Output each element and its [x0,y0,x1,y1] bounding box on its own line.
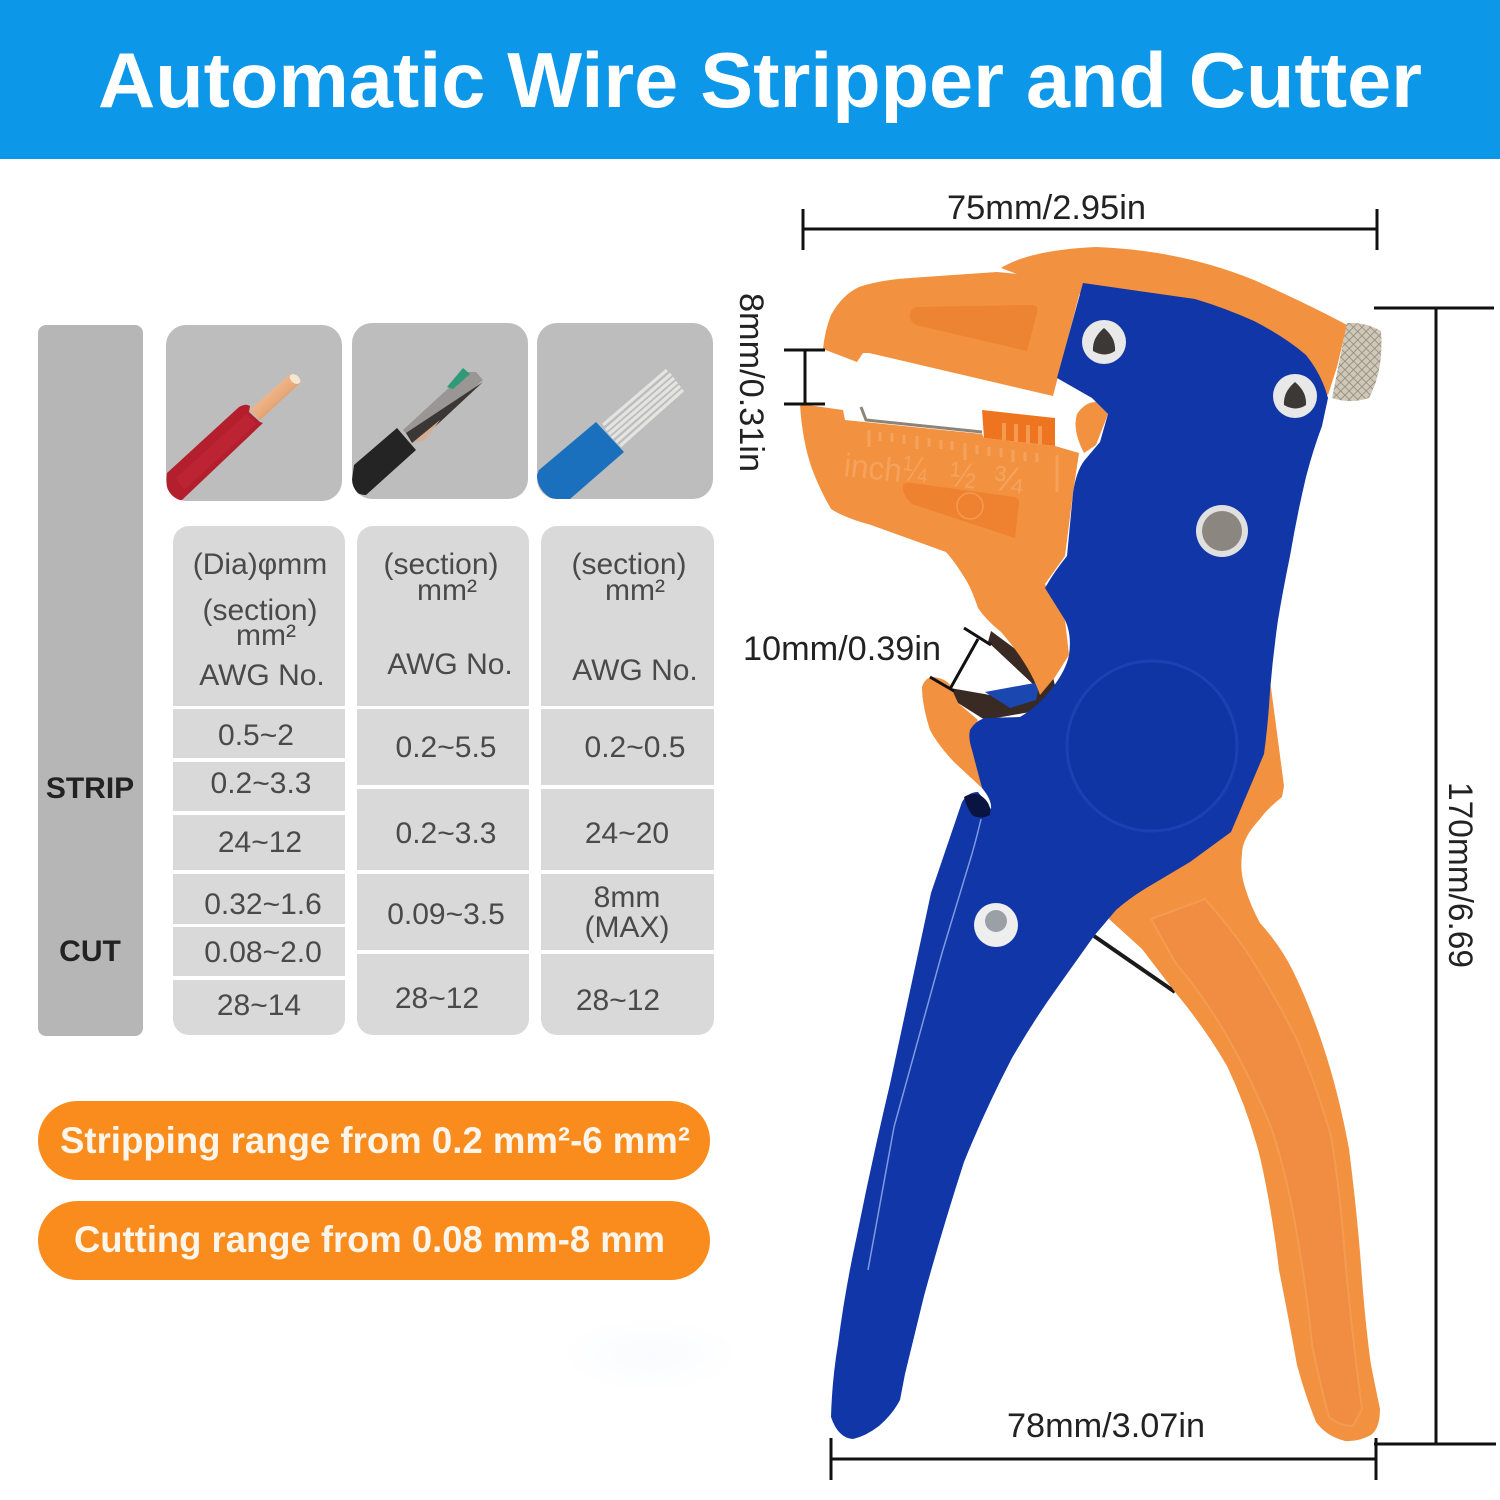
dimension: width 75mm: 75mm/2.95in [947,189,1146,227]
table column 2 text: 28~12 [395,982,479,1015]
ruler markings: inch [842,446,904,489]
specification table column 3 [541,526,714,1035]
table column 1 text: 0.32~1.6 [204,888,322,921]
table column 1 text: mm² [236,619,296,652]
dimension: base 78mm [831,1407,1376,1480]
ruler markings: ¾ [991,457,1026,501]
dimension: cutter 10mm [743,628,991,691]
lower jaw recess [903,483,1019,538]
specification table column 1 [173,526,345,1035]
table column 2 text: mm² [417,574,477,607]
rivets [974,320,1317,947]
ruler markings: ¼ [901,447,930,491]
dimension: cutter 10mm: 10mm/0.39in [743,630,941,668]
table column 1 text: AWG No. [199,659,325,692]
table column 1 text [193,548,327,1022]
table column 1 text: 0.5~2 [218,719,294,752]
dimension: height 170mm: 170mm/6.69 [1441,782,1479,968]
table column 2 text [383,548,513,1015]
table column 1 text: 0.2~3.3 [211,767,311,800]
dimension: jaw 8mm: 8mm/0.31in [732,293,770,472]
upper jaw recess [910,305,1038,351]
table column 3 text [571,548,698,1017]
upper orange jaw [823,272,1083,396]
strip label: STRIP [46,772,134,805]
table column 1 text: 28~14 [217,989,301,1022]
table column 2 text: (section) [383,548,499,581]
faint background smudge [560,1317,740,1393]
table column 3 text: AWG No. [572,654,698,687]
orange lower lip [922,677,982,788]
table column 1 text: 24~12 [218,826,302,859]
callout: stripping range [38,1101,710,1180]
table column 3 text: 0.2~0.5 [585,731,685,764]
dimension: base 78mm: 78mm/3.07in [1007,1407,1205,1445]
table column 2 text: 0.2~5.5 [396,731,496,764]
table column 2 text: AWG No. [387,648,513,681]
slot in handle [964,794,990,818]
cut label: CUT [59,935,121,968]
row label column [38,325,143,1036]
specification table column 2 [357,526,529,1035]
table column 2 text: 0.2~3.3 [396,817,496,850]
orange handle [1109,680,1380,1441]
spring wire [1094,936,1175,992]
ruler markings: ½ [948,453,978,497]
handle recess [1151,899,1362,1426]
table column 3 text: 24~20 [585,817,669,850]
table column 1 text: (section) [202,594,318,627]
table column 2 text: 0.09~3.5 [387,898,505,931]
dimension: jaw 8mm [732,293,825,472]
orange bump behind body [1076,402,1108,453]
blue body and handle [831,283,1328,1439]
lower orange jaw and body [800,404,1079,695]
pivot recess [1067,661,1237,831]
callout: cutting range [38,1201,710,1280]
table column 1 text: (Dia)φmm [193,548,327,581]
table column 3 text: mm² [605,574,665,607]
wire photo: black multi-core cable [352,323,528,499]
slider [982,410,1055,446]
cutter blades [950,631,1056,720]
knurled knob [1332,323,1382,401]
table column 1 text: 0.08~2.0 [204,936,322,969]
table column 3 text: 28~12 [576,984,660,1017]
dimension: height 170mm [1374,308,1496,1444]
table column 3 text: 8mm [594,881,660,914]
table column 3 text: (section) [571,548,687,581]
handle seam [868,819,981,1270]
callout: stripping range: Stripping range from 0.2 mm²-6 mm² [60,1120,690,1161]
wire photo: red solid copper wire [166,325,342,501]
wire photo: blue stranded wire [537,323,713,499]
title: Automatic Wire Stripper and Cutter [98,36,1422,124]
table column 3 text: (MAX) [584,911,670,944]
callout: cutting range: Cutting range from 0.08 mm-8 mm [74,1219,665,1260]
orange rear cap [1001,247,1347,395]
ruler markings [842,430,1057,501]
jaw steel strip [861,407,982,432]
wire stripper tool [800,247,1382,1441]
header banner [0,0,1500,159]
dimension: width 75mm [803,189,1377,250]
